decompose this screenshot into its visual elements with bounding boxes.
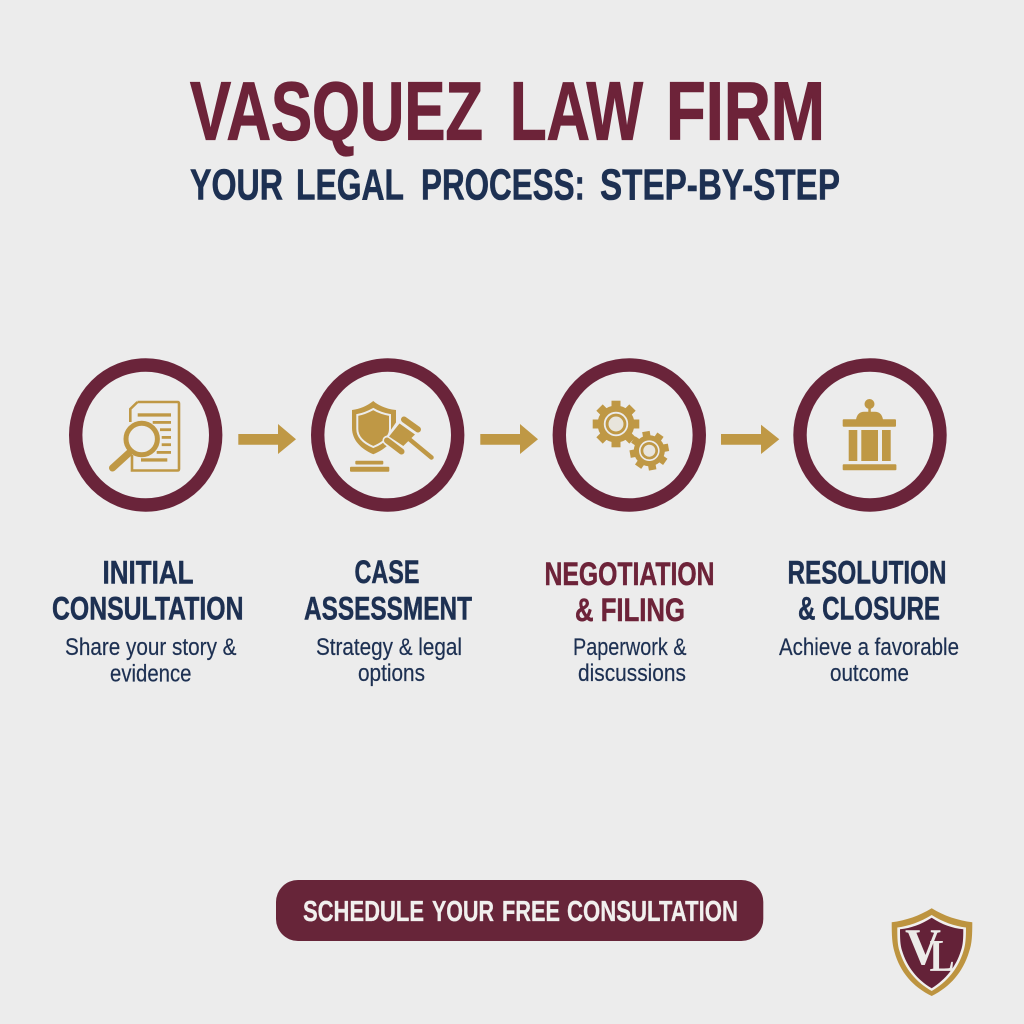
call-to-action button [276,880,763,941]
step 4 icon: courthouse [800,365,940,505]
step 3 label: & FILING [575,592,685,628]
logo: VL shield: L [930,930,954,981]
title: LAW [510,64,643,157]
step 2 label: ASSESSMENT [304,590,472,626]
step 4 label: outcome [830,660,909,687]
step 4 label: RESOLUTION [788,554,946,590]
subtitle [190,160,840,210]
step 3 label: NEGOTIATION [544,556,714,592]
step 4 label [779,554,959,687]
step 2 label [304,554,472,687]
step 1 label: CONSULTATION [52,590,244,626]
step 1 label: Share your story & [65,634,236,661]
step 1 label [52,554,244,688]
title: FIRM [666,64,825,157]
subtitle: YOUR [190,160,283,210]
step 3 icon: gears [559,365,699,505]
call-to-action button: SCHEDULE [303,896,424,928]
title: VASQUEZ [190,64,483,157]
step 4 label: Achieve a favorable [779,634,959,661]
call-to-action button: CONSULTATION [567,896,738,928]
arrow 1 [238,424,296,454]
step 1 icon: document and magnifier [76,365,216,505]
step 2 label: Strategy & legal [316,634,462,661]
step 3 label [544,556,714,687]
subtitle: PROCESS: [421,160,585,210]
step 3 label: discussions [578,660,686,687]
arrow 3 [721,425,779,454]
step 4 label: & CLOSURE [798,590,940,626]
step 2 icon: shield and gavel [318,365,458,505]
call-to-action button: FREE [502,896,560,928]
logo: VL shield [892,908,972,996]
call-to-action button: YOUR [432,896,494,928]
step 2 label: options [358,660,425,687]
logo: VL shield: V [905,919,941,976]
subtitle: STEP-BY-STEP [600,160,840,210]
step 1 label: evidence [110,660,192,688]
step 1 label: INITIAL [102,554,194,590]
subtitle: LEGAL [296,160,404,210]
arrow 2 [480,424,538,454]
step 3 label: Paperwork & [573,634,686,661]
step 2 label: CASE [354,554,420,590]
title [190,64,825,157]
